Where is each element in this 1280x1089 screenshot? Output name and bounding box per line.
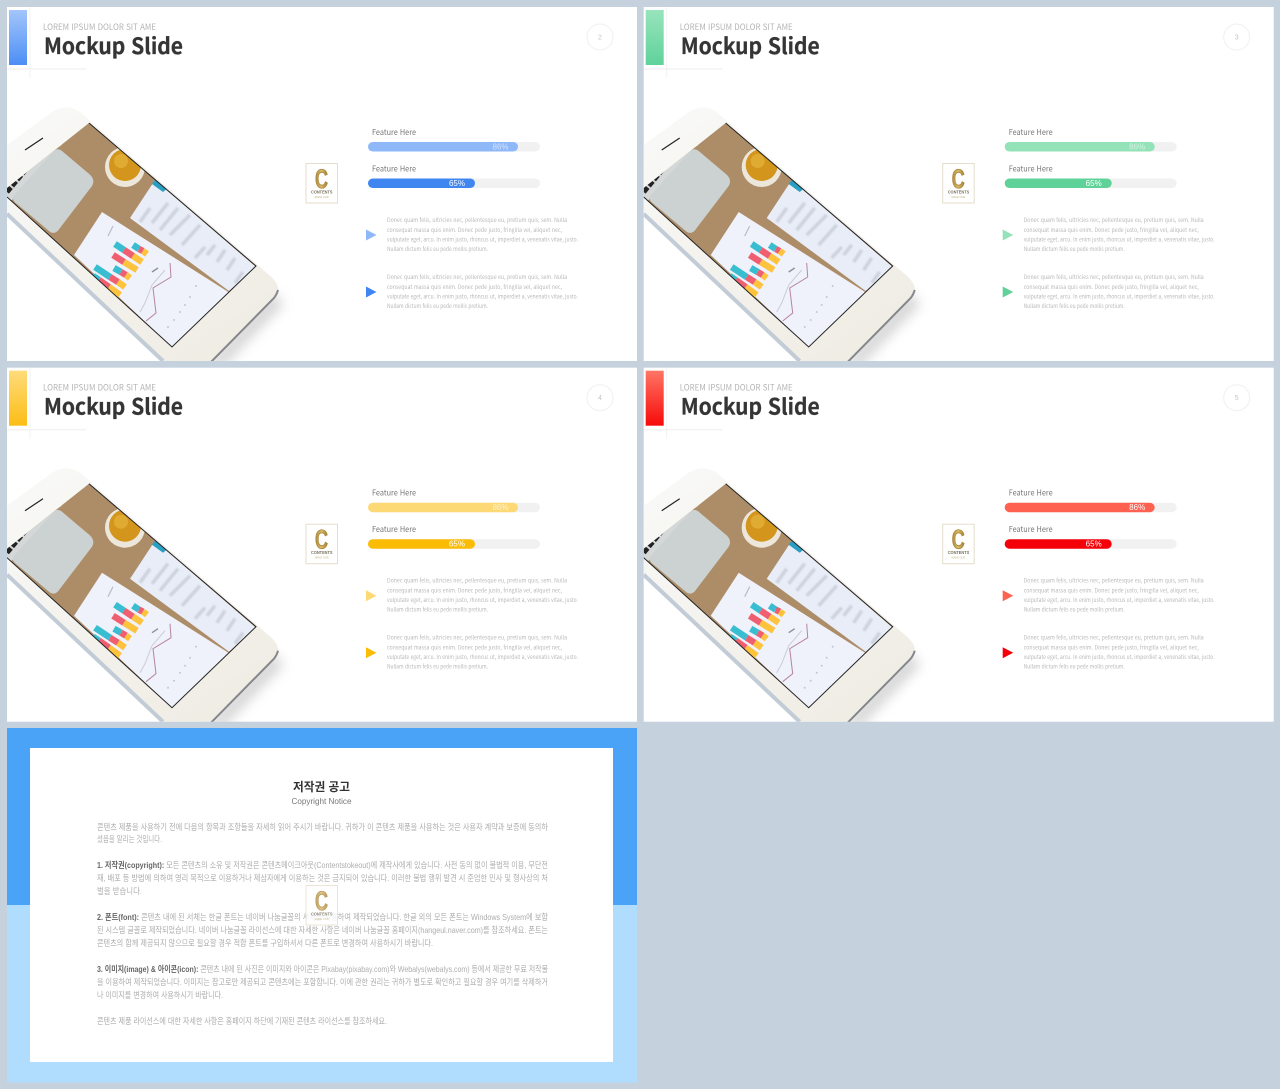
page number — [587, 24, 613, 50]
progress bar 86%: 86% — [1129, 142, 1145, 152]
progress bar 65% — [368, 523, 540, 549]
text block 2: Donec quam felis, ultricies nec, pellentesque eu, pretium quis, sem. Nulla — [387, 273, 567, 281]
watermark logo — [306, 886, 338, 925]
clause 1: copyright — [97, 860, 548, 896]
progress bar 65%: Feature Here — [372, 162, 416, 174]
text block 2: Nullam dictum felis eu pede mollis pretium. — [387, 663, 488, 671]
progress bar 65%: 65% — [449, 179, 465, 188]
clause 1: copyright: 1. 저작권(copyright): 모든 콘텐츠의 소유 및 저작권은 콘텐츠메이크아웃(Contentstokeout)에 제작사에게 있습니다. 사전 동의 없이 불법적 이용, 무단전 — [97, 860, 548, 870]
text block 2: vulputate eget, arcu. In enim justo, rhoncus ut, imperdiet a, venenatis vitae, justo. — [1024, 653, 1215, 661]
phone mockup image — [0, 108, 284, 368]
text block 1: Nullam dictum felis eu pede mollis pretium. — [1024, 606, 1125, 614]
text block 2 — [366, 634, 578, 671]
intro paragraph: 셨음을 알리는 것입니다. — [97, 834, 162, 844]
clause 3: images and icons: 나 이미지를 변경하여 사용하시기 바랍니다. — [97, 990, 223, 1000]
text block 2: Nullam dictum felis eu pede mollis pretium. — [1024, 302, 1125, 310]
page number — [587, 385, 613, 411]
text block 1: Nullam dictum felis eu pede mollis pretium. — [387, 245, 488, 253]
progress bar 86% — [368, 126, 540, 152]
text block 1: Donec quam felis, ultricies nec, pellentesque eu, pretium quis, sem. Nulla — [1024, 577, 1204, 585]
panel: red mockup slide — [637, 368, 1274, 729]
text block 1 — [1003, 216, 1215, 253]
clause 3: images and icons: 3. 이미지(image) & 아이콘(icon): 콘텐츠 내에 된 사진은 이미지와 아이콘은 Pixabay(pixabay.com)와 Webalys(webalys.com) 등에서 제공한 무료 저작물 — [97, 964, 548, 974]
notice subheading: Copyright Notice — [292, 796, 352, 806]
text block 1: consequat massa quis enim. Donec pede justo, fringilla vel, aliquet nec, — [387, 226, 562, 234]
text block 2: Nullam dictum felis eu pede mollis pretium. — [1024, 663, 1125, 671]
text block 2 — [366, 273, 578, 310]
clause 1: copyright: 재, 배포 등 방법에 의하여 영리 목적으로 이용하거나 제삼자에게 이용하는 것은 금지되어 있습니다. 이러한 불법 행위 발견 시 준엄한 민사 및 형사상의 처 — [97, 873, 548, 883]
intro paragraph: 콘텐츠 제품을 사용하기 전에 다음의 항목과 조항들을 자세히 읽어 주시기 바랍니다. 귀하가 이 콘텐츠 제품을 사용하는 것은 사용자 계약과 보증에 동의하 — [97, 822, 548, 832]
text block 2: vulputate eget, arcu. In enim justo, rhoncus ut, imperdiet a, venenatis vitae, justo. — [1024, 292, 1215, 300]
text block 2: vulputate eget, arcu. In enim justo, rhoncus ut, imperdiet a, venenatis vitae, justo. — [387, 292, 578, 300]
text block 1: vulputate eget, arcu. In enim justo, rhoncus ut, imperdiet a, venenatis vitae, justo. — [1024, 596, 1215, 604]
heading: Mockup Slide — [681, 390, 820, 422]
progress bar 86%: Feature Here — [1009, 126, 1053, 138]
accent block — [9, 371, 27, 426]
progress bar 65%: 65% — [449, 540, 465, 549]
clause 3: images and icons: 을 이용하여 제작되었습니다. 이미지는 참고로만 제공되고 콘텐츠에는 포함합니다. 이에 관한 권리는 귀하가 별도로 확인하고 필요할 경우 여기를 삭제하거 — [97, 977, 548, 987]
text block 2 — [1003, 634, 1215, 671]
text block 2: consequat massa quis enim. Donec pede justo, fringilla vel, aliquet nec, — [1024, 644, 1199, 652]
page number: 5 — [1235, 395, 1239, 402]
text block 1: consequat massa quis enim. Donec pede justo, fringilla vel, aliquet nec, — [1024, 587, 1199, 595]
heading: Mockup Slide — [44, 390, 183, 422]
page number: 2 — [598, 34, 602, 42]
text block 1: vulputate eget, arcu. In enim justo, rhoncus ut, imperdiet a, venenatis vitae, justo. — [1024, 236, 1215, 244]
page number — [1224, 385, 1250, 411]
progress bar 86%: 86% — [492, 503, 509, 512]
progress bar 86%: 86% — [492, 142, 509, 152]
clause 3: images and icons — [97, 964, 548, 1000]
text block 2: Nullam dictum felis eu pede mollis pretium. — [387, 302, 488, 310]
page number: 4 — [598, 395, 602, 402]
text block 2: Donec quam felis, ultricies nec, pellentesque eu, pretium quis, sem. Nulla — [387, 634, 567, 642]
page number: 3 — [1235, 34, 1239, 42]
progress bar 65% — [368, 162, 540, 188]
watermark logo — [943, 524, 974, 564]
clause 2: font: 된 시스템 글꼴로 제작되었습니다. 네이버 나눔글꼴 라이선스에 대한 자세한 사항은 네이버 나눔글꼴 홈페이지(hangeul.naver.com)를 참조하세요. 폰트는 — [97, 925, 548, 935]
intro paragraph — [97, 822, 548, 844]
progress bar 65%: 65% — [1086, 540, 1102, 549]
text block 1: Donec quam felis, ultricies nec, pellentesque eu, pretium quis, sem. Nulla — [1024, 216, 1204, 224]
eyebrow text: LOREM IPSUM DOLOR SIT AME — [680, 21, 793, 33]
text block 1: consequat massa quis enim. Donec pede justo, fringilla vel, aliquet nec, — [387, 587, 562, 595]
progress bar 86%: Feature Here — [372, 487, 416, 499]
phone mockup image — [0, 468, 284, 729]
progress bar 86% — [1005, 126, 1177, 152]
text block 1: consequat massa quis enim. Donec pede justo, fringilla vel, aliquet nec, — [1024, 226, 1199, 234]
phone mockup image — [637, 108, 921, 368]
progress bar 65%: Feature Here — [1009, 523, 1053, 535]
text block 2: consequat massa quis enim. Donec pede justo, fringilla vel, aliquet nec, — [387, 644, 562, 652]
text block 2 — [1003, 273, 1215, 310]
progress bar 86%: Feature Here — [372, 126, 416, 138]
notice heading: 저작권 공고 — [293, 779, 350, 794]
accent block — [646, 371, 664, 426]
progress bar 65% — [1005, 162, 1177, 188]
text block 1: Donec quam felis, ultricies nec, pellentesque eu, pretium quis, sem. Nulla — [387, 577, 567, 585]
clause 2: font: 2. 폰트(font): 콘텐츠 내에 된 서체는 한글 폰트는 네이버 나눔글꼴의 서체를 사용하여 제작되었습니다. 한글 외의 모든 폰트는 Windows System에 보함 — [97, 912, 548, 922]
panel: yellow mockup slide — [0, 368, 637, 729]
progress bar 65%: Feature Here — [1009, 162, 1053, 174]
watermark logo — [306, 164, 338, 203]
page number — [1224, 24, 1250, 50]
progress bar 86% — [1005, 487, 1177, 512]
text block 1 — [366, 577, 578, 614]
clause 2: font: 콘텐츠의 함께 제공되지 않으므로 필요할 경우 적합 폰트를 구입하셔서 다른 폰트로 변경하여 사용하시기 바랍니다. — [97, 938, 433, 948]
closing line: 콘텐츠 제품 라이선스에 대한 자세한 사항은 홈페이지 하단에 기재된 콘텐츠 라이선스를 참조하세요. — [97, 1016, 387, 1026]
heading: Mockup Slide — [681, 29, 820, 61]
progress bar 65% — [1005, 523, 1177, 549]
text block 1: Nullam dictum felis eu pede mollis pretium. — [1024, 245, 1125, 253]
clause 1: copyright: 벌을 받습니다. — [97, 886, 142, 896]
text block 1 — [1003, 577, 1215, 614]
watermark logo — [306, 524, 338, 564]
text block 1: Nullam dictum felis eu pede mollis pretium. — [387, 606, 488, 614]
text block 2: vulputate eget, arcu. In enim justo, rhoncus ut, imperdiet a, venenatis vitae, justo. — [387, 653, 578, 661]
panel: copyright notice slide — [7, 728, 637, 1082]
heading: Mockup Slide — [44, 29, 183, 61]
text block 1 — [366, 216, 578, 253]
text block 1: vulputate eget, arcu. In enim justo, rhoncus ut, imperdiet a, venenatis vitae, justo. — [387, 236, 578, 244]
text block 2: Donec quam felis, ultricies nec, pellentesque eu, pretium quis, sem. Nulla — [1024, 634, 1204, 642]
text block 1: vulputate eget, arcu. In enim justo, rhoncus ut, imperdiet a, venenatis vitae, justo. — [387, 596, 578, 604]
text block 1: Donec quam felis, ultricies nec, pellentesque eu, pretium quis, sem. Nulla — [387, 216, 567, 224]
watermark logo — [943, 164, 974, 203]
progress bar 86%: 86% — [1129, 503, 1145, 512]
progress bar 65%: Feature Here — [372, 523, 416, 535]
phone mockup image — [637, 468, 921, 729]
accent block — [646, 10, 664, 65]
accent block — [9, 10, 27, 65]
panel: green mockup slide — [637, 7, 1274, 368]
text block 2: consequat massa quis enim. Donec pede justo, fringilla vel, aliquet nec, — [387, 283, 562, 291]
text block 2: Donec quam felis, ultricies nec, pellentesque eu, pretium quis, sem. Nulla — [1024, 273, 1204, 281]
progress bar 65%: 65% — [1086, 179, 1102, 188]
eyebrow text: LOREM IPSUM DOLOR SIT AME — [680, 382, 793, 394]
panel: blue mockup slide — [0, 7, 637, 368]
eyebrow text: LOREM IPSUM DOLOR SIT AME — [43, 382, 156, 394]
progress bar 86%: Feature Here — [1009, 487, 1053, 499]
progress bar 86% — [368, 487, 540, 512]
eyebrow text: LOREM IPSUM DOLOR SIT AME — [43, 21, 156, 33]
text block 2: consequat massa quis enim. Donec pede justo, fringilla vel, aliquet nec, — [1024, 283, 1199, 291]
clause 2: font — [97, 912, 548, 948]
